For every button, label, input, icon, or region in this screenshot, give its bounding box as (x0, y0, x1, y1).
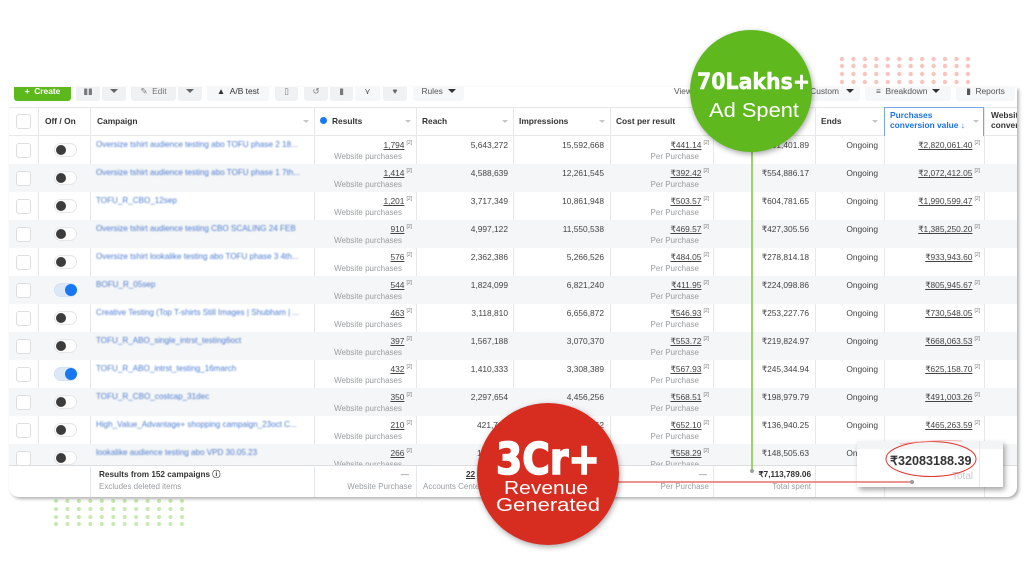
row 4: [2] (406, 224, 412, 230)
callout: 70 Lakhs ad spent: Ad Spent (709, 99, 799, 122)
row 3: [2] (406, 196, 412, 202)
toolbar: ▮ (339, 86, 344, 96)
row 10: [2] (974, 392, 980, 398)
table header labels: Cost per result (616, 116, 675, 126)
row 3: Ongoing (846, 196, 878, 206)
row 6: ₹224,098.86 (762, 280, 809, 290)
row 9: 432 (390, 364, 404, 374)
row 11: [2] (974, 420, 980, 426)
row 1: Per Purchase (651, 152, 699, 161)
row 12: lookalike audience testing abo VPD 30.05.23 (96, 448, 257, 457)
toolbar: ▮ Reports (966, 86, 1005, 96)
row 8: [2] (703, 336, 709, 342)
row 8: [2] (406, 336, 412, 342)
table footer totals: Accounts Center (423, 482, 482, 491)
row 9: [2] (406, 364, 412, 370)
callout: 3 Cr revenue generated: Generated (496, 494, 600, 515)
row 7: 3,118,810 (471, 308, 508, 318)
table header labels: Reach (422, 116, 447, 126)
row 7: Per Purchase (651, 320, 699, 329)
row 8: Per Purchase (651, 348, 699, 357)
callout: 3 Cr revenue generated: 3Cr+ (496, 434, 600, 485)
row 6: Website purchases (334, 292, 402, 301)
row 9: Website purchases (334, 376, 402, 385)
row 2: [2] (406, 168, 412, 174)
row 7: 463 (390, 308, 404, 318)
footer top border (9, 465, 1017, 466)
row 11: [2] (406, 420, 412, 426)
row 1: [2] (406, 140, 412, 146)
row 1: Website purchases (334, 152, 402, 161)
table footer totals: Excludes deleted items (99, 482, 181, 491)
row 4: [2] (974, 224, 980, 230)
row 5: ₹278,814.18 (762, 252, 809, 262)
row 4 (0, 220, 1024, 248)
row 11: ₹465,263.59 (925, 420, 972, 430)
toolbar: ♥ (392, 86, 397, 96)
row 6: 6,821,240 (567, 280, 604, 290)
row 11: 210 (390, 420, 404, 430)
row 3: Per Purchase (651, 208, 699, 217)
table body rows (9, 140, 1017, 465)
row 1: ₹441.14 (670, 140, 701, 150)
row 7: [2] (406, 308, 412, 314)
row 7 (16, 308, 980, 329)
table footer totals: 22 (466, 470, 475, 479)
row 6: BOFU_R_05sep (96, 280, 155, 289)
row 5: [2] (406, 252, 412, 258)
row 3: 1,201 (383, 196, 404, 206)
row 7: Creative Testing (Top T-shirts Still Images | Shubham | ... (96, 308, 299, 317)
row 4: ₹427,305.56 (762, 224, 809, 234)
row 12: ₹558.29 (670, 448, 701, 458)
row 6: Ongoing (846, 280, 878, 290)
row 9 (16, 364, 980, 385)
row 11: High_Value_Advantage+ shopping campaign_23oct C... (96, 420, 297, 429)
row 12: Ongoing (846, 448, 878, 458)
row 2: [2] (703, 168, 709, 174)
row 11: ₹136,940.25 (762, 420, 809, 430)
row 7: Website purchases (334, 320, 402, 329)
row 8: Website purchases (334, 348, 402, 357)
row 1: 15,592,668 (562, 140, 604, 150)
row 1 (16, 140, 980, 161)
row 5: [2] (703, 252, 709, 258)
row 10 (0, 388, 1024, 416)
row 6: [2] (703, 280, 709, 286)
row 5: 5,266,526 (567, 252, 604, 262)
callout: 3 Cr revenue generated: Revenue (504, 477, 588, 498)
table header labels: conversion value ↓ (890, 120, 965, 130)
table header labels: Impressions (519, 116, 568, 126)
row 12: 266 (390, 448, 404, 458)
row 8: ₹219,824.97 (762, 336, 809, 346)
row 9: [2] (703, 364, 709, 370)
row 12: ₹148,505.63 (762, 448, 809, 458)
row 3: ₹503.57 (670, 196, 701, 206)
row 2: 4,588,639 (471, 168, 508, 178)
row 4: 11,550,538 (563, 224, 604, 234)
row 10: ₹568.51 (670, 392, 701, 402)
create button: + Create (25, 86, 60, 96)
row 2: ₹554,886.17 (762, 168, 809, 178)
row 2: Oversize tshirt audience testing abo TOFU phase 1 7th... (96, 168, 300, 177)
row 11: 421,7 (477, 420, 498, 430)
row 2: [2] (974, 168, 980, 174)
row 1: [2] (974, 140, 980, 146)
toolbar: View (674, 86, 692, 96)
table footer totals: — (699, 470, 707, 479)
row 11 (16, 420, 980, 441)
row 6: [2] (406, 280, 412, 286)
toolbar: ▯ (284, 86, 289, 96)
row 2: Per Purchase (651, 180, 699, 189)
row 2: Ongoing (846, 168, 878, 178)
row 5 (16, 252, 980, 273)
row 4: 4,997,122 (471, 224, 508, 234)
row 6 (0, 276, 1024, 304)
table header labels: Ends (821, 116, 841, 126)
row 10: Per Purchase (651, 404, 699, 413)
row 4: Per Purchase (651, 236, 699, 245)
table header row (9, 107, 1017, 136)
toolbar: ↺ (312, 86, 320, 96)
row 8 (0, 332, 1024, 360)
row 1: Ongoing (846, 140, 878, 150)
table footer totals: Total spent (772, 482, 811, 491)
row 9: Ongoing (846, 364, 878, 374)
table header labels (16, 107, 1017, 136)
row 7: 6,656,872 (567, 308, 604, 318)
row 1: 5,643,272 (471, 140, 508, 150)
revenue total value: ₹32083188.39 (890, 454, 972, 468)
row 2: 1,414 (383, 168, 404, 178)
row 7: ₹730,548.05 (925, 308, 972, 318)
toolbar: ▲ A/B test (217, 86, 259, 96)
row 4: ₹469.57 (670, 224, 701, 234)
row 6: Per Purchase (651, 292, 699, 301)
table footer totals: ₹7,113,789.06 (758, 470, 811, 479)
row 10: 2,297,654 (471, 392, 508, 402)
row 9: 3,308,389 (567, 364, 604, 374)
toolbar: Custom (810, 86, 839, 96)
panel: ads manager table (9, 87, 1017, 497)
row 10: [2] (406, 392, 412, 398)
row 9: ₹245,344.94 (762, 364, 809, 374)
row 10: [2] (703, 392, 709, 398)
row 5: Website purchases (334, 264, 402, 273)
row 8: 397 (390, 336, 404, 346)
row 5: [2] (974, 252, 980, 258)
row 7: Ongoing (846, 308, 878, 318)
row 11: ₹652.10 (670, 420, 701, 430)
row 3: ₹604,781.65 (762, 196, 809, 206)
row 9: Per Purchase (651, 376, 699, 385)
row 3: ₹1,990,599.47 (918, 196, 972, 206)
row 2 (0, 164, 1024, 192)
row 3: Website purchases (334, 208, 402, 217)
row 3: 10,861,948 (562, 196, 604, 206)
row 6: 544 (390, 280, 404, 290)
row 10: Ongoing (846, 392, 878, 402)
row 4: 910 (390, 224, 404, 234)
row 8: ₹668,063.53 (925, 336, 972, 346)
row 5: Oversize tshirt lookalike testing abo TOFU phase 3 4th... (96, 252, 299, 261)
table header labels: Results (332, 116, 362, 126)
row 9: ₹625,158.70 (925, 364, 972, 374)
row 7: [2] (974, 308, 980, 314)
row 10: Website purchases (334, 404, 402, 413)
row 10: 4,456,256 (567, 392, 604, 402)
toolbar: Rules (421, 86, 443, 96)
row 9: [2] (974, 364, 980, 370)
row 3: [2] (974, 196, 980, 202)
row 5: 576 (390, 252, 404, 262)
row 1: ₹561,401.89 (762, 140, 809, 150)
row 4: Oversize tshirt audience testing CBO SCALING 24 FEB (96, 224, 296, 233)
row 10: TOFU_R_CBO_costcap_31dec (96, 392, 209, 401)
row 5: Per Purchase (651, 264, 699, 273)
row 12: 1,7 (477, 448, 489, 458)
row 7: ₹253,227.76 (762, 308, 809, 318)
table footer totals: Website Purchase (347, 482, 412, 491)
total label: Total (952, 471, 973, 482)
row 1: 1,794 (383, 140, 404, 150)
table footer totals: Results from 152 campaigns ⓘ (99, 470, 220, 479)
row 2: Website purchases (334, 180, 402, 189)
row 8: 3,070,370 (567, 336, 604, 346)
row 1: [2] (703, 140, 709, 146)
row 4: ₹1,385,250.20 (918, 224, 972, 234)
row 4: Ongoing (846, 224, 878, 234)
row 8: 1,567,188 (471, 336, 508, 346)
row 3 (16, 196, 980, 217)
toolbar: ▮▮ (83, 86, 93, 96)
row 8: TOFU_R_ABO_single_intrst_testing6oct (96, 336, 241, 345)
table footer totals (99, 470, 811, 491)
row 7: ₹546.93 (670, 308, 701, 318)
row 6: ₹805,945.67 (925, 280, 972, 290)
row 5: ₹933,943.60 (925, 252, 972, 262)
row 6: ₹411.95 (671, 280, 701, 290)
row 7: [2] (703, 308, 709, 314)
row 8: [2] (974, 336, 980, 342)
row 3: TOFU_R_CBO_12sep (96, 196, 177, 205)
row 4: Website purchases (334, 236, 402, 245)
row 6: [2] (974, 280, 980, 286)
create button (14, 87, 71, 101)
row 1: ₹2,820,061.40 (918, 140, 972, 150)
row 3: 3,717,349 (471, 196, 508, 206)
row 1: Oversize tshirt audience testing abo TOFU phase 2 18... (96, 140, 298, 149)
row 12: [2] (406, 448, 412, 454)
row 5: Ongoing (846, 252, 878, 262)
toolbar: ✎ Edit (140, 86, 167, 96)
row 2: 12,261,545 (562, 168, 604, 178)
row 8: Ongoing (846, 336, 878, 346)
row 4: [2] (703, 224, 709, 230)
row 8: ₹553.72 (670, 336, 701, 346)
row 2: ₹2,072,412.05 (918, 168, 972, 178)
row 5: ₹484.05 (670, 252, 701, 262)
row 11: 52 (595, 420, 604, 430)
toolbar (14, 86, 1015, 101)
row 2: ₹392.42 (670, 168, 701, 178)
row 6: 1,824,099 (471, 280, 508, 290)
table header labels: Off / On (45, 116, 76, 126)
row 10: 350 (390, 392, 404, 402)
row 11: Ongoing (846, 420, 878, 430)
table footer totals: — (401, 470, 409, 479)
row 12 (0, 444, 1024, 472)
row 9: TOFU_R_ABO_intrst_testing_16march (96, 364, 236, 373)
table header labels: Purchases (890, 110, 932, 120)
row 10: ₹491,003.26 (925, 392, 972, 402)
row 11: [2] (703, 420, 709, 426)
row 3: [2] (703, 196, 709, 202)
popup: total revenue (857, 441, 1003, 487)
row 11: Website purchases (334, 432, 402, 441)
toolbar: ≡ Breakdown (876, 86, 927, 96)
table header labels: Campaign (97, 116, 138, 126)
row 10: ₹198,979.79 (762, 392, 809, 402)
row 12: [2] (703, 448, 709, 454)
row 11: Per Purchase (651, 432, 699, 441)
callout: 70 Lakhs ad spent: 70Lakhs+ (697, 70, 810, 95)
row 9: 1,410,333 (471, 364, 508, 374)
toolbar: ⋎ (364, 86, 371, 96)
row 9: ₹567.93 (670, 364, 701, 374)
row 5: 2,362,386 (471, 252, 508, 262)
table footer totals: Per Purchase (661, 482, 709, 491)
